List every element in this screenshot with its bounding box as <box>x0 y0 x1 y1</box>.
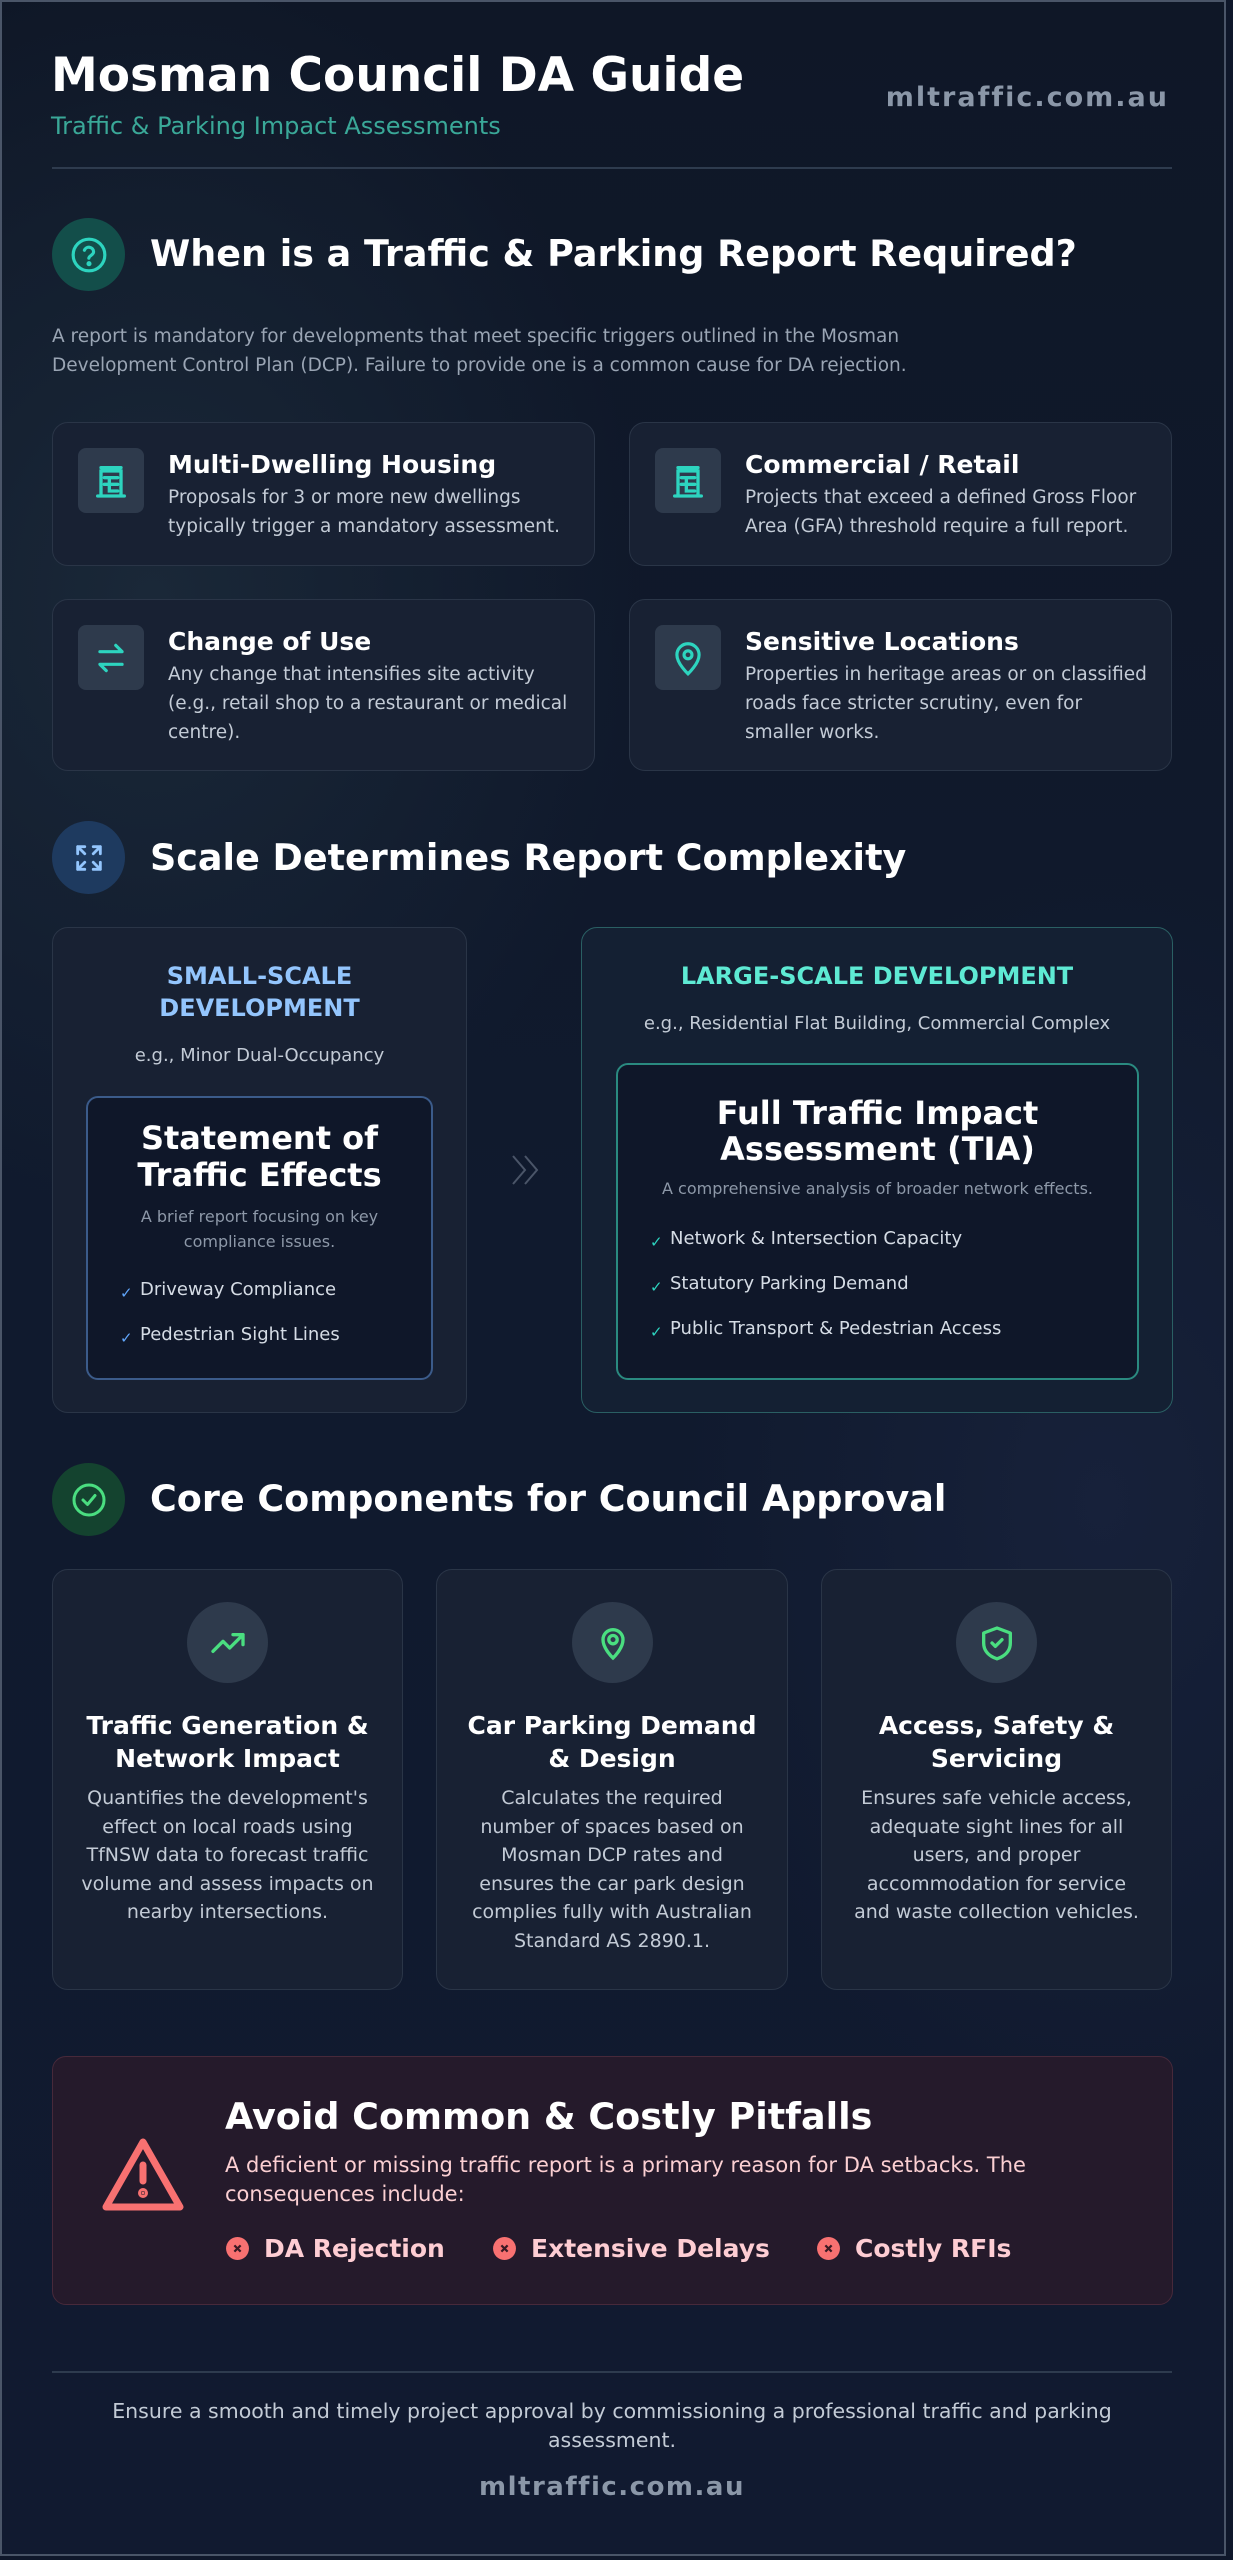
box: full TIA: Network & Intersection Capacity <box>670 1228 962 1249</box>
panel: small-scale <box>52 927 467 1413</box>
card: traffic generation: TfNSW data to forecast traffic <box>87 1844 368 1866</box>
card: multi-dwelling: Multi-Dwelling Housing <box>168 450 496 479</box>
card: change of use <box>52 599 595 771</box>
box: full TIA: ✓ <box>650 1278 663 1296</box>
panel: pitfalls: A deficient or missing traffic report is a primary reason for DA setbacks. The consequences include: <box>225 2153 1026 2206</box>
icon: arrows <box>78 625 144 690</box>
panel: large-scale: e.g., Residential Flat Building, Commercial Complex <box>644 1013 1110 1034</box>
card: traffic generation: Quantifies the development's <box>87 1787 368 1809</box>
footer text <box>112 2399 1112 2452</box>
box: statement of traffic effects: compliance issues. <box>184 1232 335 1251</box>
card: access safety: adequate sight lines for all <box>870 1816 1123 1838</box>
consequences list: Extensive Delays <box>531 2234 770 2263</box>
box: statement of traffic effects: Traffic Effects <box>137 1156 382 1194</box>
title: Mosman Council DA Guide <box>51 48 744 103</box>
card: sensitive locations: Properties in heritage areas or on classified <box>745 664 1147 685</box>
box: full TIA: Statutory Parking Demand <box>670 1273 909 1294</box>
card: traffic generation: nearby intersections. <box>127 1901 328 1923</box>
icon: building <box>78 448 144 513</box>
panel: large-scale: LARGE-SCALE DEVELOPMENT <box>681 962 1073 990</box>
card: traffic generation: effect on local roads using <box>102 1816 353 1838</box>
card: access safety: accommodation for service <box>867 1873 1126 1895</box>
box: full TIA: Full Traffic Impact <box>717 1094 1038 1132</box>
box: statement of traffic effects: ✓ <box>120 1329 133 1347</box>
footer brand: mltraffic.com.au <box>479 2472 745 2502</box>
icon: pin <box>572 1602 653 1683</box>
box: full TIA <box>616 1063 1139 1380</box>
card: car parking: number of spaces based on <box>480 1816 744 1838</box>
box: full TIA: ✓ <box>650 1323 663 1341</box>
card: access safety <box>821 1569 1172 1990</box>
icon: trend <box>187 1602 268 1683</box>
box: statement of traffic effects: Statement of <box>141 1119 378 1157</box>
panel: large-scale <box>581 927 1173 1413</box>
box: full TIA: Assessment (TIA) <box>720 1130 1035 1168</box>
panel: small-scale: e.g., Minor Dual-Occupancy <box>135 1045 384 1066</box>
heading: pitfalls: Avoid Common & Costly Pitfalls <box>225 2095 872 2138</box>
card: traffic generation: volume and assess impacts on <box>81 1873 374 1895</box>
heading: core components: Core Components for Council Approval <box>150 1477 946 1520</box>
footer text: Ensure a smooth and timely project approval by commissioning a professional traffic and parking <box>112 2399 1112 2423</box>
icon: warning <box>102 2138 184 2210</box>
card: change of use: Any change that intensifies site activity <box>168 664 535 685</box>
card: sensitive locations: Sensitive Locations <box>745 627 1019 656</box>
card: car parking: & Design <box>548 1744 676 1773</box>
icon: pin <box>655 625 721 690</box>
card: multi-dwelling: typically trigger a mandatory assessment. <box>168 516 560 537</box>
card: sensitive locations: roads face stricter scrutiny, even for <box>745 693 1082 714</box>
card: change of use: (e.g., retail shop to a restaurant or medical <box>168 693 567 714</box>
intro paragraph <box>52 326 907 376</box>
icon: building <box>655 448 721 513</box>
card: access safety: Access, Safety & <box>879 1711 1114 1740</box>
card: car parking: ensures the car park design <box>479 1873 745 1895</box>
card: car parking: Car Parking Demand <box>467 1711 756 1740</box>
card: car parking <box>436 1569 788 1990</box>
card: change of use: Change of Use <box>168 627 371 656</box>
heading: when required: When is a Traffic & Parking Report Required? <box>150 232 1077 275</box>
card: access safety: Servicing <box>931 1744 1062 1773</box>
intro paragraph: A report is mandatory for developments that meet specific triggers outlined in the Mosman <box>52 326 899 347</box>
card: access safety: users, and proper <box>913 1844 1080 1866</box>
card: sensitive locations: smaller works. <box>745 722 879 743</box>
card: change of use: centre). <box>168 722 240 743</box>
box: statement of traffic effects: Driveway Compliance <box>140 1279 336 1300</box>
card: commercial: Commercial / Retail <box>745 450 1019 479</box>
card: commercial: Area (GFA) threshold require a full report. <box>745 516 1128 537</box>
box: statement of traffic effects: ✓ <box>120 1284 133 1302</box>
box: full TIA: A comprehensive analysis of broader network effects. <box>662 1179 1093 1198</box>
card: traffic generation: Traffic Generation & <box>86 1711 369 1740</box>
icon: question <box>52 218 125 291</box>
subtitle: Traffic & Parking Impact Assessments <box>51 112 501 140</box>
icon: check circle <box>52 1463 125 1536</box>
box: full TIA: ✓ <box>650 1233 663 1251</box>
arrow: chevron <box>512 1156 538 1184</box>
card: access safety: Ensures safe vehicle access, <box>861 1787 1132 1809</box>
intro paragraph: Development Control Plan (DCP). Failure to provide one is a common cause for DA rejection. <box>52 355 907 376</box>
card: car parking: Mosman DCP rates and <box>501 1844 723 1866</box>
brand top: mltraffic.com.au <box>886 82 1169 113</box>
heading: scale: Scale Determines Report Complexity <box>150 836 906 879</box>
box: statement of traffic effects: Pedestrian Sight Lines <box>140 1324 340 1345</box>
panel: pitfalls <box>52 2056 1173 2305</box>
card: access safety: and waste collection vehicles. <box>854 1901 1139 1923</box>
card: multi-dwelling: Proposals for 3 or more new dwellings <box>168 487 521 508</box>
card: car parking: complies fully with Australian <box>472 1901 752 1923</box>
icon: shield <box>956 1602 1037 1683</box>
consequences list: DA Rejection <box>264 2234 445 2263</box>
consequences list <box>226 2234 1011 2263</box>
box: statement of traffic effects <box>86 1096 433 1380</box>
card: car parking: Standard AS 2890.1. <box>514 1930 710 1952</box>
card: traffic generation: Network Impact <box>115 1744 340 1773</box>
box: statement of traffic effects: A brief report focusing on key <box>141 1207 378 1226</box>
footer text: assessment. <box>548 2428 676 2452</box>
icon: expand <box>52 821 125 894</box>
card: commercial: Projects that exceed a defined Gross Floor <box>745 487 1136 508</box>
card: multi-dwelling <box>52 422 595 566</box>
card: sensitive locations <box>629 599 1172 771</box>
panel: small-scale: DEVELOPMENT <box>159 994 360 1022</box>
panel: small-scale: SMALL-SCALE <box>167 962 352 990</box>
box: full TIA: Public Transport & Pedestrian Access <box>670 1318 1001 1339</box>
card: car parking: Calculates the required <box>501 1787 723 1809</box>
card: commercial <box>629 422 1172 566</box>
consequences list: Costly RFIs <box>855 2234 1011 2263</box>
card: traffic generation <box>52 1569 403 1990</box>
